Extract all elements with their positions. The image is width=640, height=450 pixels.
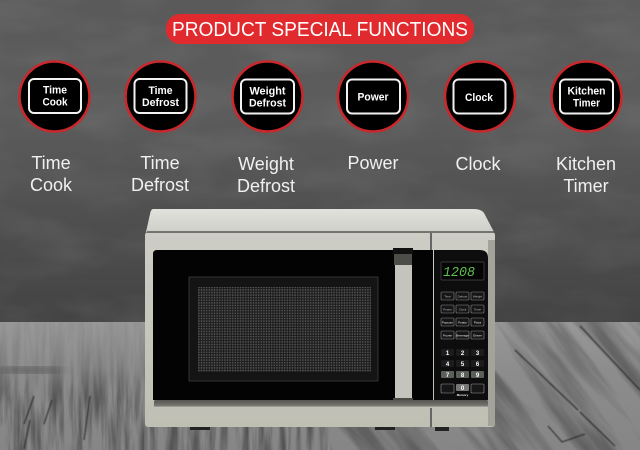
background: slate wall: [0, 0, 640, 324]
function button labels: Defrost: [458, 294, 468, 298]
function button labels: Weight: [473, 294, 482, 298]
label: time cook: Time: [31, 153, 71, 173]
icon: clock: [445, 62, 515, 132]
icon: time defrost: [126, 62, 196, 132]
right side of body: [488, 240, 495, 426]
label: weight defrost: Weight: [238, 154, 294, 174]
microwave feet: [190, 427, 449, 431]
number keypad: 3: [476, 351, 480, 357]
icon: time defrost: Time: [148, 85, 172, 97]
door glass: [153, 250, 433, 400]
number keypad: 7: [446, 373, 450, 379]
function buttons: [441, 292, 484, 339]
door seam: [430, 233, 432, 427]
background: wooden floor: [0, 322, 640, 450]
function button labels: Popcorn: [442, 320, 453, 324]
label: kitchen timer: Kitchen: [556, 154, 616, 174]
number keypad: 6: [476, 362, 480, 368]
control panel: [434, 250, 488, 400]
label: weight defrost: Defrost: [237, 176, 295, 196]
number keypad: 9: [476, 373, 480, 379]
icon: time cook: Cook: [42, 96, 68, 108]
icon: time defrost: Defrost: [142, 97, 179, 109]
label: time defrost: Time: [140, 153, 180, 173]
function button labels: Dinner: [473, 334, 482, 338]
function button labels: Pizza: [474, 320, 481, 324]
function button labels: Power: [443, 308, 452, 312]
number keypad: Memory: [457, 393, 469, 397]
microwave front body: [145, 232, 495, 427]
door window: [189, 277, 378, 381]
label: power: Power: [347, 153, 399, 173]
icon: weight defrost: Weight: [250, 86, 286, 98]
digital display: [441, 262, 484, 281]
label: time cook: Cook: [30, 175, 73, 195]
icon: time cook: Time: [43, 84, 67, 96]
icon: kitchen timer: Kitchen: [568, 86, 606, 98]
icon: power: [338, 62, 408, 132]
function button labels: Timer: [474, 308, 481, 312]
icon: kitchen timer: Timer: [573, 98, 601, 110]
icon: weight defrost: [232, 62, 302, 132]
number keypad: 5: [461, 362, 465, 368]
microwave: [145, 209, 495, 431]
function button labels: [442, 294, 482, 338]
top edge shadow: [147, 231, 494, 233]
door bottom trim: [154, 400, 488, 408]
label: time defrost: Defrost: [131, 175, 189, 195]
icon: power: Power: [358, 92, 389, 104]
digital display: 1208: [443, 265, 475, 281]
number keypad: 2: [461, 351, 465, 357]
function button labels: Frozen: [443, 334, 452, 338]
microwave top panel: [146, 209, 494, 232]
icon: clock: Clock: [465, 92, 494, 104]
label: clock: Clock: [455, 154, 502, 174]
function button labels: Clock: [459, 308, 467, 312]
title pill: PRODUCT SPECIAL FUNCTIONS: [172, 19, 468, 41]
label: kitchen timer: Timer: [563, 176, 609, 196]
number keypad: 4: [446, 362, 450, 368]
number keypad: 8: [461, 373, 465, 379]
number keypad: 1: [446, 351, 450, 357]
icon: time cook: [20, 62, 90, 132]
function button labels: Potato: [458, 320, 467, 324]
number keypad: [441, 349, 484, 397]
icon: kitchen timer: [552, 62, 622, 132]
door mesh: [198, 287, 371, 372]
number keypad: 0: [461, 386, 465, 392]
icon: weight defrost: Defrost: [249, 98, 286, 110]
function button labels: Time: [444, 294, 451, 298]
door handle: [393, 248, 413, 408]
function button labels: Beverage: [456, 334, 469, 338]
